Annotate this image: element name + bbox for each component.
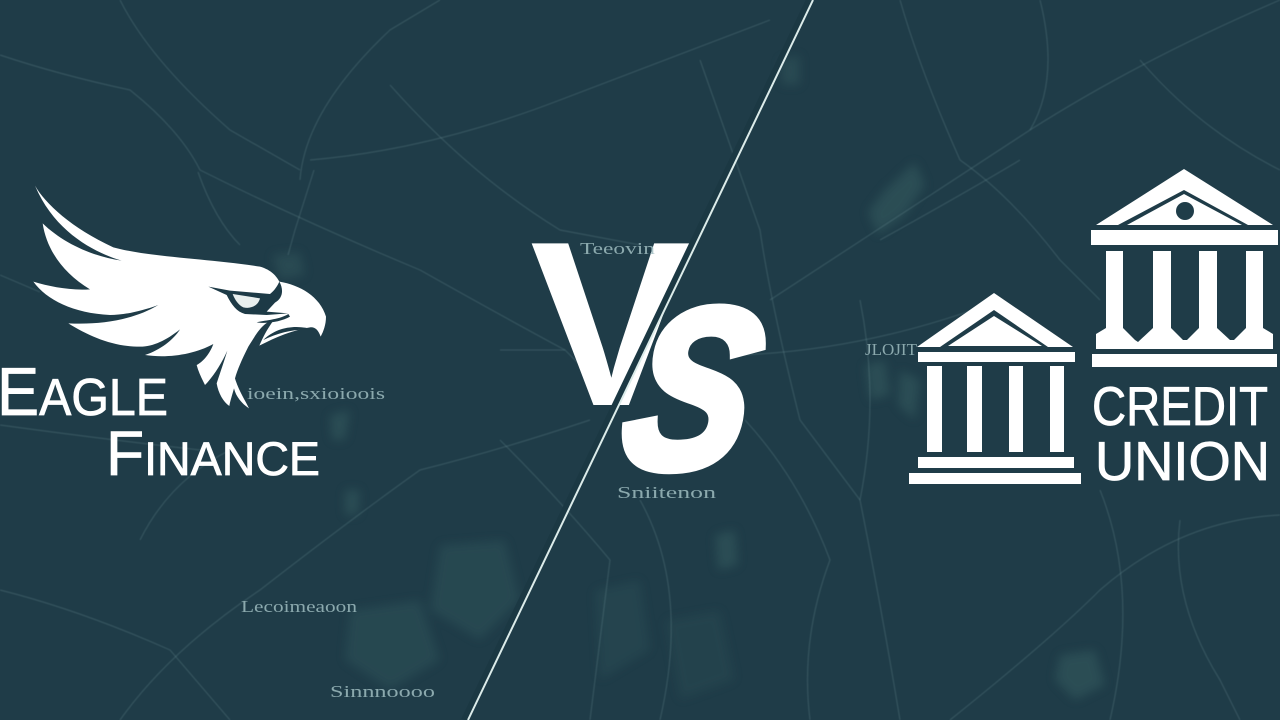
small label: bottom: Sinnnoooo — [330, 682, 435, 701]
word: Union: UNION — [1095, 430, 1270, 492]
small label: left of small temple: JLOJIT — [865, 340, 918, 359]
small label: lower left: Lecoimeaoon — [241, 597, 358, 616]
VS lettering — [530, 192, 780, 516]
heading: Credit Union — [1092, 375, 1270, 492]
small label: beside eagle: ioein,sxioioois — [247, 384, 385, 403]
word: Finance: FINANCE — [106, 419, 320, 489]
icon: eagle — [33, 186, 326, 408]
map terrain patches — [272, 55, 1105, 700]
letter V: V — [530, 192, 692, 455]
word: Eagle: EAGLE — [0, 354, 168, 430]
diagonal divider line — [464, 0, 813, 720]
eagle brow and eye — [208, 282, 315, 340]
heading: Eagle Finance — [0, 354, 320, 489]
icon: large bank temple — [1091, 169, 1278, 367]
letter S: S — [607, 262, 780, 516]
icon: small bank temple — [909, 293, 1081, 484]
small label: top centre: Teeovin — [580, 239, 656, 258]
small label: below VS: Sniitenon — [617, 483, 717, 502]
